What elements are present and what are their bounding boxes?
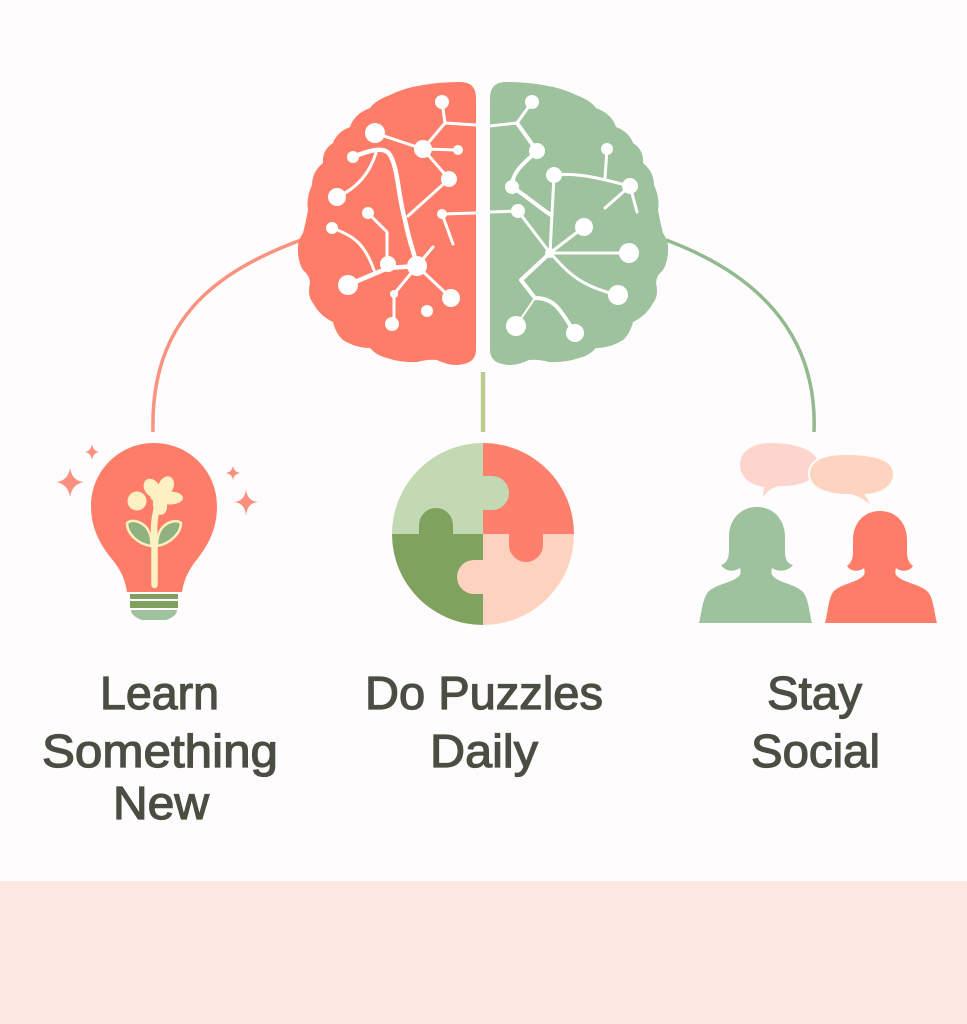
label: Learn Something New: New (113, 777, 210, 829)
label: Stay Social (751, 667, 880, 777)
label: Do Puzzles Daily: Do Puzzles (365, 667, 603, 719)
puzzle piece: bottom right (483, 534, 574, 625)
icon: puzzle circle (392, 443, 574, 625)
label: Do Puzzles Daily (365, 667, 603, 777)
sparkles (56, 444, 258, 516)
label: Do Puzzles Daily: Daily (430, 725, 538, 777)
icon: lightbulb with flower (56, 443, 258, 620)
left brain hemisphere (298, 82, 476, 365)
puzzle tab: bottom right (457, 560, 483, 594)
puzzle tab: top right (509, 534, 543, 562)
right brain hemisphere (490, 82, 668, 365)
bulb glass (91, 443, 217, 592)
flower stem and petals (127, 474, 183, 585)
bulb base stripes (130, 594, 178, 620)
speech bubble: peach (809, 454, 894, 507)
puzzle tab: top left (483, 476, 509, 510)
person: coral (825, 511, 937, 623)
person: green (699, 507, 812, 623)
connector: brain to people (666, 240, 814, 432)
speech bubble: pink (740, 443, 818, 497)
brain illustration (298, 82, 668, 365)
label: Learn Something New: Something (42, 725, 278, 777)
bottom band (0, 881, 967, 1024)
puzzle piece: bottom left (392, 534, 483, 625)
label: Learn Something New (42, 667, 278, 829)
label: Learn Something New: Learn (100, 667, 219, 719)
icon: two people talking (699, 443, 937, 623)
connector: brain to puzzle (481, 372, 485, 432)
label: Stay Social: Social (751, 725, 880, 777)
puzzle piece: top left (392, 443, 483, 534)
connector: brain to lightbulb (153, 240, 301, 432)
puzzle piece: top right (483, 443, 574, 534)
puzzle tab: bottom left (419, 508, 453, 534)
label: Stay Social: Stay (767, 667, 862, 719)
